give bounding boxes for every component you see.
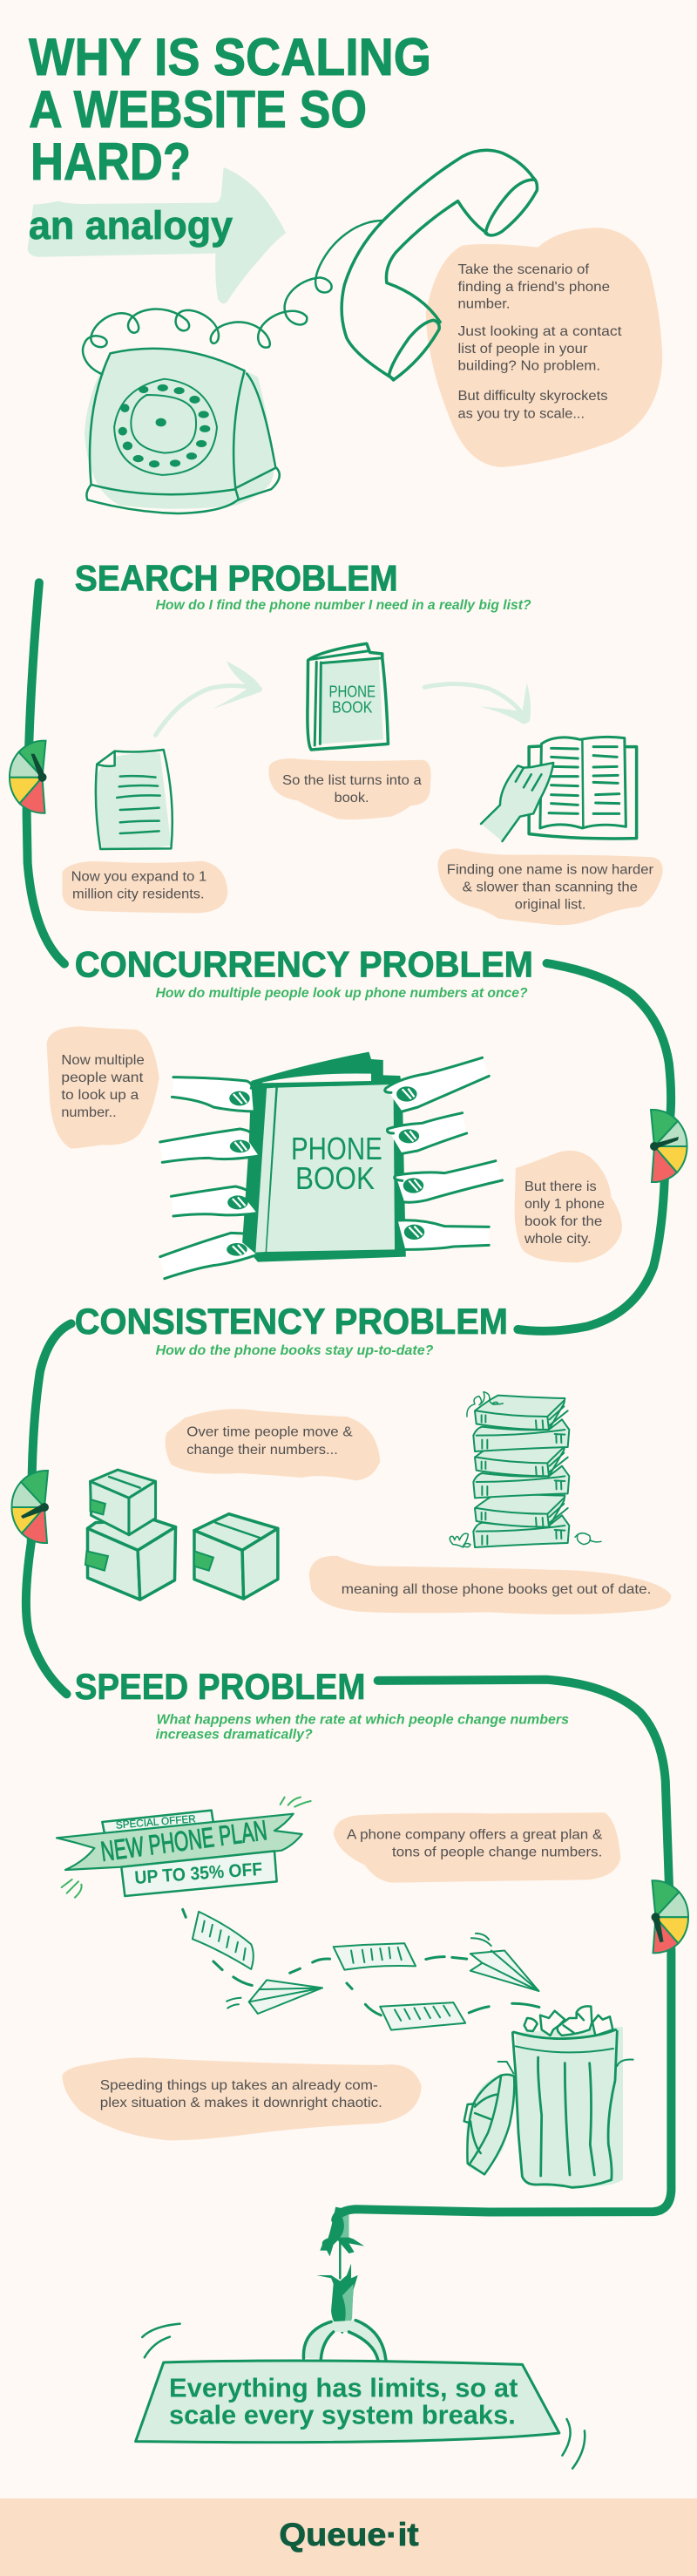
callout: weight with conclusion	[136, 2324, 585, 2469]
icon: hanging weight ring	[303, 2321, 386, 2360]
illustration: hands holding phone book	[160, 1052, 503, 1279]
flying papers and paper planes	[183, 1909, 539, 2030]
footer band	[0, 2498, 697, 2576]
subheading: speed	[156, 1712, 569, 1743]
timeline: right path concurrency	[518, 963, 671, 1331]
timeline: left path search	[27, 582, 64, 964]
subtitle: an analogy	[29, 203, 233, 248]
illustration: frayed rope	[316, 2207, 364, 2334]
timeline: left path consistency	[26, 1323, 71, 1694]
hands right	[385, 1057, 503, 1249]
subheading: speed: What happens when the rate at which people change numbers	[157, 1712, 569, 1728]
caption: phone company	[334, 1812, 620, 1883]
icon: phone book: PHONE	[329, 683, 376, 700]
icon: phone book	[308, 643, 388, 750]
title	[29, 28, 431, 191]
icon: special offer banner: NEW PHONE PLAN	[99, 1814, 269, 1867]
caption: expand: million city residents.	[72, 887, 205, 902]
caption: multiple people: to look up a	[61, 1088, 139, 1103]
icon: rotary telephone	[83, 150, 537, 513]
icon: special offer banner: UP TO 35% OFF	[134, 1859, 263, 1888]
caption: expand: Now you expand to 1	[71, 870, 206, 885]
caption: multiple people: people want	[61, 1071, 144, 1085]
caption: expand	[62, 861, 227, 913]
icon: special offer banner: SPECIAL OFFER	[115, 1812, 197, 1832]
gauge: search	[10, 741, 47, 813]
icon: trash can with lid	[464, 2006, 633, 2187]
caption: over time: Over time people move &	[186, 1425, 353, 1440]
caption: multiple people: Now multiple	[61, 1053, 145, 1068]
caption: over time	[166, 1409, 380, 1480]
arrow: list to book	[156, 661, 261, 735]
title: HARD?	[30, 133, 191, 191]
caption: phone company: tons of people change numbers.	[392, 1845, 602, 1859]
arrow behind subtitle	[28, 167, 286, 303]
icon: stack of phone books with cobwebs	[450, 1392, 601, 1547]
caption: finding one name: Finding one name is now harder	[447, 862, 654, 877]
panel: intro speech blob: Just looking at a contact	[458, 324, 622, 339]
heading: speed problem: SPEED PROBLEM	[75, 1666, 365, 1707]
caption: list turns into book: book.	[335, 791, 369, 805]
panel: intro speech blob: building? No problem.	[458, 359, 600, 373]
caption: only 1 phone book: only 1 phone	[524, 1197, 605, 1212]
panel: intro speech blob: Take the scenario of	[458, 262, 590, 277]
icon: paper list	[96, 750, 173, 849]
caption: finding one name: original list.	[515, 897, 585, 912]
gauge: speed	[652, 1880, 688, 1953]
panel: intro speech blob: finding a friend's phone	[458, 280, 610, 295]
title: WHY IS SCALING	[29, 28, 431, 86]
callout: weight with conclusion: Everything has limits, so at	[169, 2372, 518, 2403]
caption: only 1 phone book: book for the	[524, 1214, 602, 1229]
caption: multiple people: number..	[61, 1105, 117, 1120]
caption: list turns into book: So the list turns into a	[282, 773, 422, 788]
finger nails	[227, 1086, 424, 1256]
heading: concurrency problem: CONCURRENCY PROBLEM	[75, 944, 533, 985]
caption: out of date	[309, 1556, 671, 1614]
caption: phone company: A phone company offers a great plan &	[347, 1827, 603, 1842]
subheading: speed: increases dramatically?	[156, 1728, 313, 1743]
icon: hand on open book	[481, 737, 637, 841]
caption: only 1 phone book	[515, 1151, 622, 1262]
caption: speeding things up: plex situation & makes it downright chaotic.	[100, 2096, 382, 2110]
icon: phone book: BOOK	[332, 698, 373, 716]
panel: intro speech blob: list of people in your	[458, 342, 588, 357]
subheading: search: How do I find the phone number I need in a really big list?	[156, 598, 531, 613]
panel: intro speech blob	[426, 228, 662, 467]
caption: multiple people	[47, 1026, 159, 1149]
caption: finding one name: & slower than scanning the	[463, 880, 638, 894]
caption: over time: change their numbers...	[186, 1443, 338, 1458]
timeline: right path speed	[335, 1680, 671, 2219]
caption: list turns into book	[269, 758, 431, 819]
panel: intro speech blob: as you try to scale...	[458, 406, 585, 422]
callout: weight with conclusion: scale every system breaks.	[169, 2400, 516, 2430]
hands left	[160, 1077, 259, 1279]
caption: speeding things up	[62, 2057, 422, 2140]
footer band: Queue·it	[279, 2517, 419, 2552]
gauge: concurrency	[650, 1110, 687, 1182]
gauge: consistency	[11, 1471, 49, 1543]
illustration: hands holding phone book: PHONE	[291, 1131, 382, 1166]
subheading: concurrency: How do multiple people look up phone numbers at once?	[156, 986, 528, 1001]
icon: special offer banner	[57, 1798, 311, 1898]
title: A WEBSITE SO	[29, 80, 367, 139]
caption: only 1 phone book: But there is	[524, 1179, 597, 1194]
heading: consistency problem: CONSISTENCY PROBLEM	[75, 1301, 508, 1342]
arrow: book to open book	[424, 683, 531, 724]
icon: moving boxes	[85, 1470, 278, 1600]
caption: out of date: meaning all those phone books get out of date.	[342, 1582, 651, 1597]
caption: speeding things up: Speeding things up takes an already com-	[100, 2078, 378, 2093]
heading: search problem: SEARCH PROBLEM	[75, 557, 398, 598]
panel: intro speech blob: number.	[458, 296, 511, 312]
illustration: hands holding phone book: BOOK	[295, 1160, 375, 1196]
panel: intro speech blob: But difficulty skyrockets	[458, 389, 608, 404]
caption: only 1 phone book: whole city.	[524, 1232, 592, 1247]
caption: finding one name	[438, 848, 663, 925]
subheading: consistency: How do the phone books stay up-to-date?	[156, 1343, 434, 1358]
